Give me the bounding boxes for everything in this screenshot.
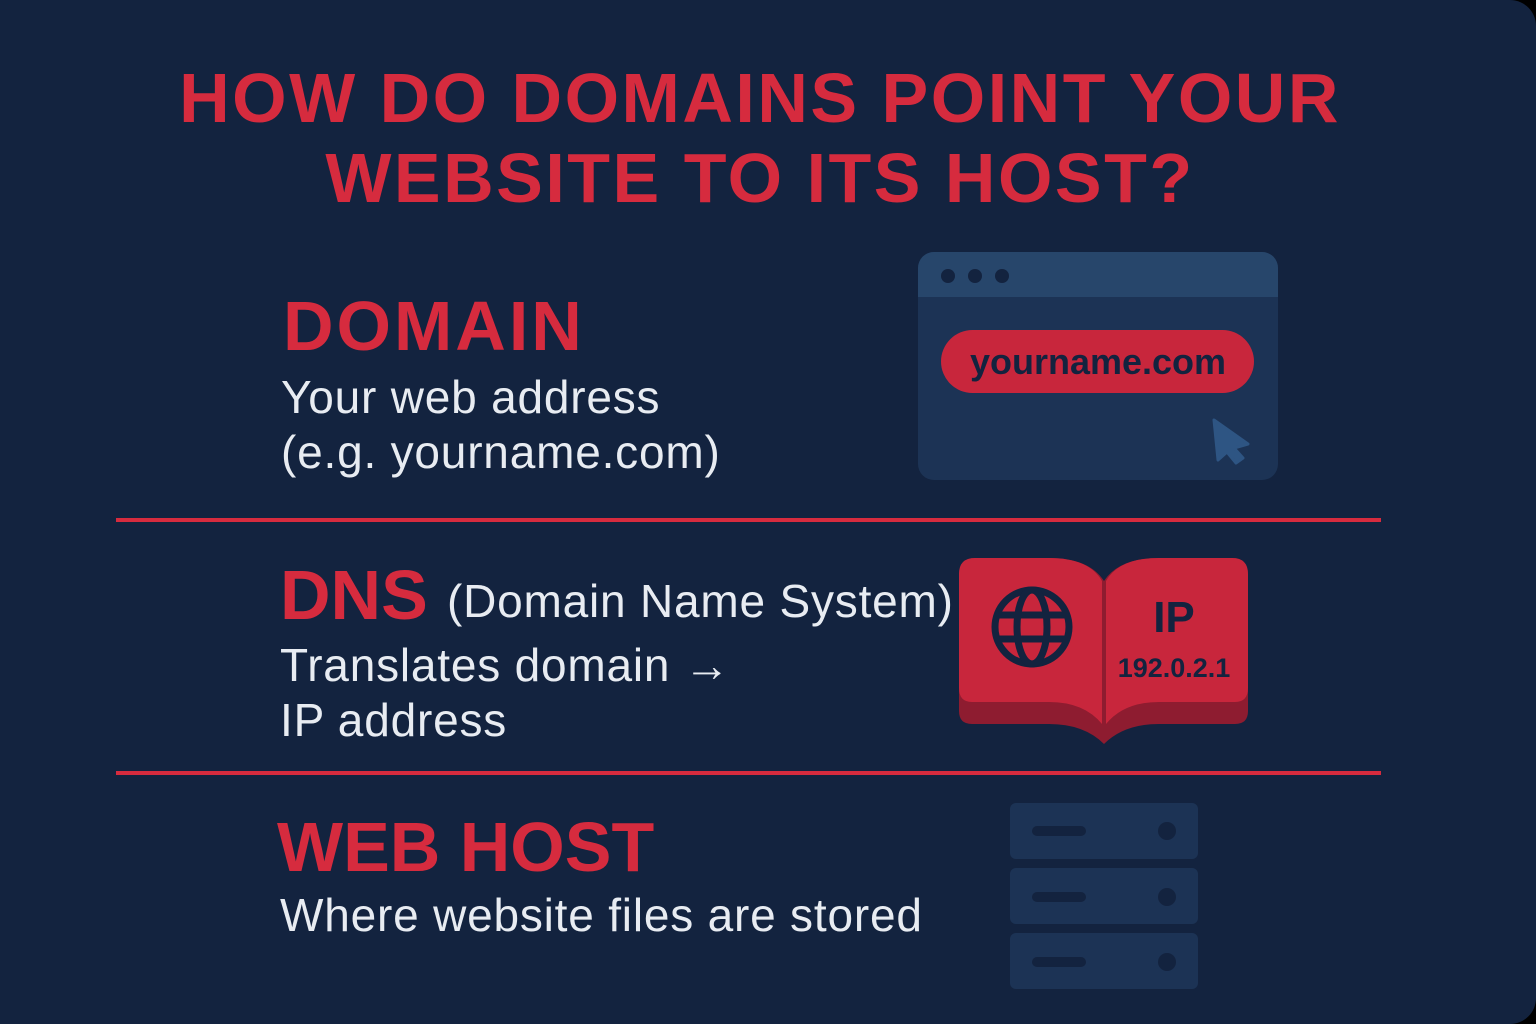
heading: domain: DOMAIN xyxy=(283,287,585,365)
title xyxy=(179,59,1341,217)
heading: web host: WEB HOST xyxy=(277,808,654,886)
text: domain description: Your web address xyxy=(281,371,660,423)
title: WEBSITE TO ITS HOST? xyxy=(325,139,1195,217)
text: DNS subtitle: (Domain Name System) xyxy=(447,575,954,627)
icon: open book with IP: IP xyxy=(1153,593,1195,642)
text: domain description: (e.g. yourname.com) xyxy=(281,426,721,478)
text: DNS description: IP address xyxy=(280,694,507,746)
text: DNS description: Translates domain → xyxy=(280,639,731,691)
heading: DNS: DNS xyxy=(280,556,428,634)
text: web host description: Where website files are stored xyxy=(280,889,923,941)
text: DNS description xyxy=(280,639,731,746)
icon: server stack xyxy=(1010,803,1198,989)
icon: browser window xyxy=(918,252,1278,480)
text: domain description xyxy=(281,371,721,478)
icon: open book with IP xyxy=(959,558,1248,744)
icon: open book with IP: 192.0.2.1 xyxy=(1118,653,1230,683)
title: HOW DO DOMAINS POINT YOUR xyxy=(179,59,1341,137)
icon: browser window: yourname.com xyxy=(970,341,1226,382)
